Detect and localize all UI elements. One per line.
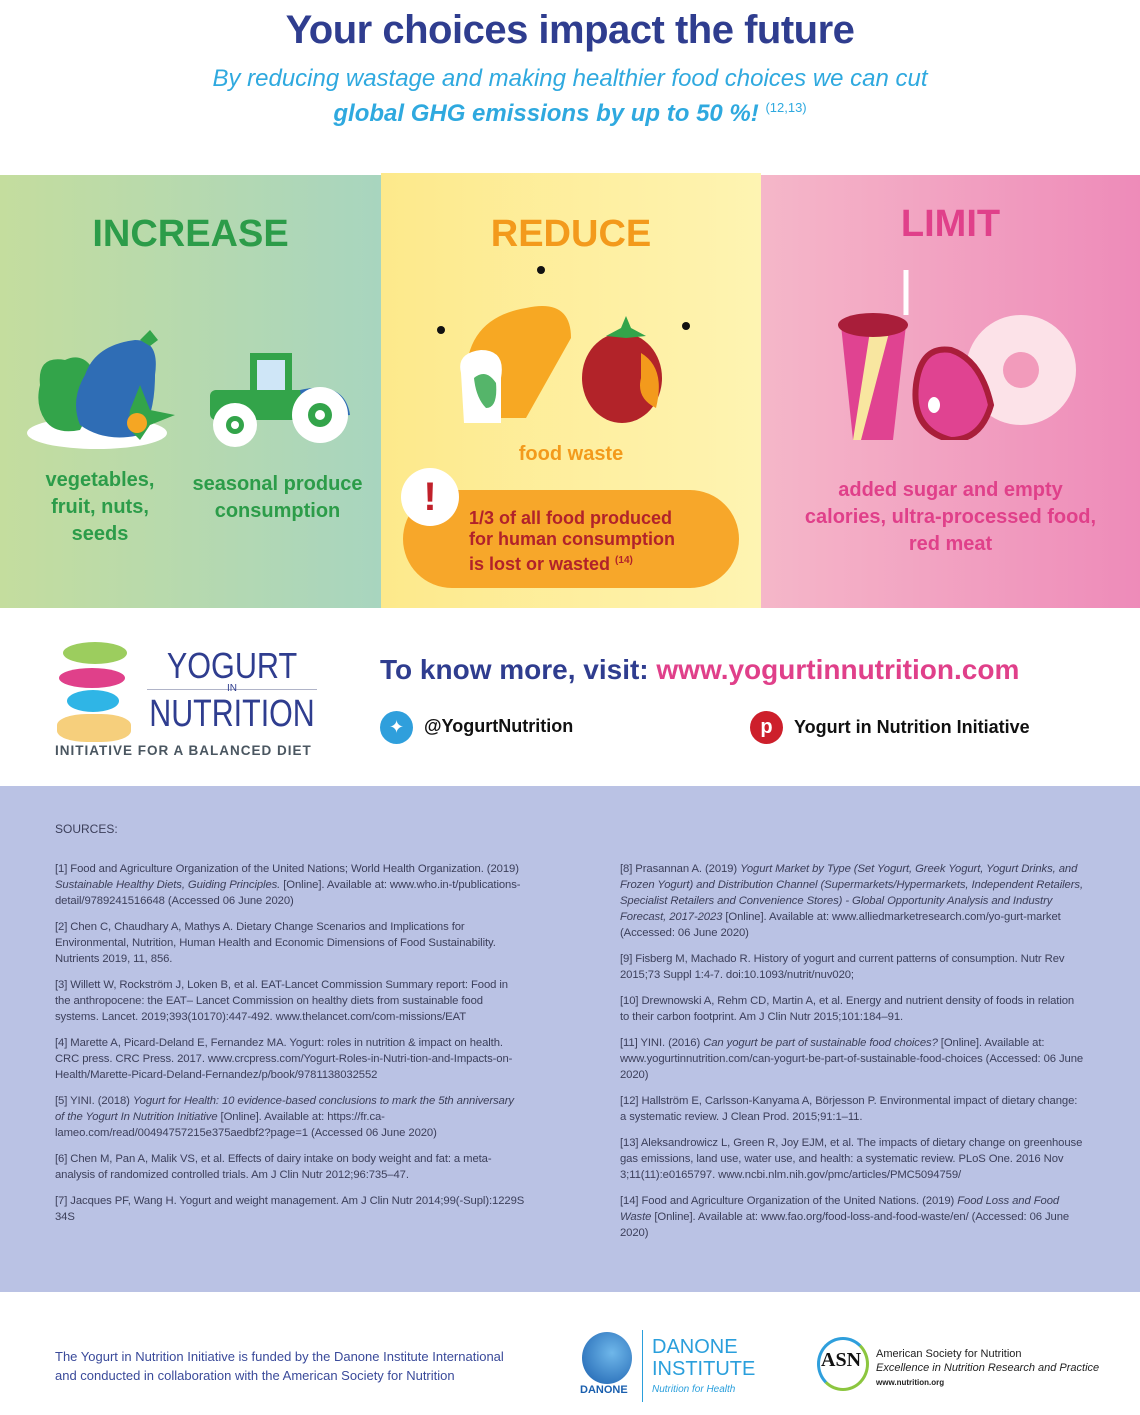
logo: ASN: American Society for Nutrition — [876, 1348, 1022, 1360]
text: added sugar: calories, ultra-processed food, — [805, 506, 1096, 528]
text: seasonal produce: seasonal produce — [192, 473, 363, 495]
sources right column: [12] Hallström E, Carlsson-Kanyama A, Börjesson P. Environmental impact of dietary change: a systematic review. J Clean Prod. 2015;91:1–11. — [620, 1095, 1077, 1123]
sources right column: [8] Prasannan A. (2019) Yogurt Market by Type (Set Yogurt, Greek Yogurt, Yogurt Drinks, and Frozen Yogurt) and Distribution Channel (Supermarkets/Hypermarkets, Independent Retailers, Specialist Retailers and Convenience Stores) - Global Opportunity Analysis and Industry Forecast, 2017-2023 [Online]. Available at: www.alliedmarketresearch.com/yo-gurt-market (Accessed: 06 June 2020) — [620, 863, 1083, 939]
text: added sugar — [805, 479, 1096, 555]
social: twitter — [380, 711, 573, 744]
sources right column: [9] Fisberg M, Machado R. History of yogurt and current patterns of consumption. Nutr Rev 2015;73 Suppl 1:4-7. doi:10.1093/nutrit/nuv020; — [620, 953, 1064, 981]
text: funding note — [55, 1349, 504, 1383]
sources left column: [1] Food and Agriculture Organization of the United Nations; World Health Organization. (2019) Sustainable Healthy Diets, Guiding Principles. [Online]. Available at: www.who.in-t/publications-detail/9789241516648 (Accessed 06 June 2020) — [55, 863, 520, 907]
sources left column: [7] Jacques PF, Wang H. Yogurt and weight management. Am J Clin Nutr 2014;99(-Supl):1229S 34S — [55, 1195, 524, 1223]
sources left column: [3] Willett W, Rockström J, Loken B, et al. EAT-Lancet Commission Summary report: Food in the anthropocene: the EAT– Lancet Commission on healthy diets from sustainable food systems. Lancet. 2019;393(10170):447-492. www.thelancet.com/com-missions/EAT — [55, 979, 508, 1023]
logo: danone institute — [580, 1330, 755, 1402]
sources left column: [5] YINI. (2018) Yogurt for Health: 10 evidence-based conclusions to mark the 5th anniversary of the Yogurt In Nutrition Initiative [Online]. Available at: https://fr.ca-lameo.com/read/00494757215e375aedbf2?page=1 (Accessed 06 June 2020) — [55, 1095, 514, 1139]
logo: ASN — [817, 1337, 1099, 1391]
callout: one third wasted: for human consumption — [469, 529, 675, 549]
social: pinterest — [750, 711, 1030, 744]
text: funding note: The Yogurt in Nutrition Initiative is funded by the Danone Institute International — [55, 1349, 504, 1364]
logo: ASN: ASN — [821, 1349, 861, 1371]
text: p — [760, 716, 773, 738]
logo: ASN: Excellence in Nutrition Research and Practice — [876, 1362, 1099, 1374]
text: seasonal produce — [192, 473, 363, 522]
icon: tractor — [210, 353, 350, 447]
text: Yogurt in Nutrition Initiative — [794, 717, 1030, 737]
text: @YogurtNutrition — [424, 716, 573, 736]
logo: danone institute: DANONE — [580, 1384, 628, 1396]
subtitle — [212, 65, 928, 127]
icon: exclamation — [401, 468, 459, 526]
icon: fruits and vegetables — [27, 330, 175, 449]
subtitle: global GHG emissions by up to 50 %! (12,13) — [333, 100, 807, 127]
panel: reduce — [381, 173, 761, 608]
text: added sugar: red meat — [909, 533, 992, 555]
heading: limit: LIMIT — [901, 203, 1000, 245]
callout: one third wasted: is lost or wasted (14) — [469, 554, 633, 574]
logo: yogurt in nutrition — [55, 642, 317, 758]
logo: yogurt in nutrition: INITIATIVE FOR A BALANCED DIET — [55, 743, 312, 758]
callout: one third wasted: 1/3 of all food produced — [469, 508, 672, 528]
callout: one third wasted — [403, 490, 739, 588]
icon: exclamation: ! — [423, 475, 437, 519]
logo: ASN: www.nutrition.org — [876, 1378, 944, 1387]
subtitle: By reducing wastage and making healthier food choices we can cut — [212, 65, 928, 92]
panel: increase — [0, 175, 381, 608]
logo: danone institute: DANONE — [652, 1336, 738, 1358]
sources right column: [11] YINI. (2016) Can yogurt be part of sustainable food choices? [Online]. Available at: www.yogurtinnutrition.com/can-yogurt-be-part-of-sustainable-food-choices (Accessed: 06 June 2020) — [620, 1037, 1083, 1081]
panel: sources — [0, 786, 1140, 1292]
text: seasonal produce: consumption — [215, 500, 340, 522]
icon: bread and tomato — [437, 266, 690, 423]
sources right column: [14] Food and Agriculture Organization of the United Nations. (2019) Food Loss and Food Waste [Online]. Available at: www.fao.org/food-loss-and-food-waste/en/ (Accessed: 06 June 2020) — [620, 1195, 1069, 1239]
logo: yogurt in nutrition: NUTRITION — [149, 693, 315, 735]
text: vegetables: fruit, nuts, — [51, 496, 149, 518]
sources left column: [4] Marette A, Picard-Deland E, Fernandez MA. Yogurt: roles in nutrition & impact on health. CRC press. CRC Press. 2017. www.crcpress.com/Yogurt-Roles-in-Nutri-tion-and-Impacts-on-Health/Marette-Picard-Deland-Fernandez/p/book/9781138032552 — [55, 1037, 512, 1081]
logo: danone institute: INSTITUTE — [652, 1358, 755, 1380]
text: vegetables: seeds — [72, 523, 128, 545]
text: added sugar: added sugar and empty — [838, 479, 1063, 501]
logo: yogurt in nutrition: YOGURT — [167, 645, 297, 686]
heading: sources: SOURCES: — [55, 822, 118, 836]
text: visit website: To know more, visit: www.yogurtinnutrition.com — [380, 654, 1019, 685]
text: food waste: food waste — [519, 443, 623, 465]
text: funding note: and conducted in collaboration with the American Society for Nutrition — [55, 1368, 455, 1383]
text: ✦ — [389, 717, 404, 737]
heading: reduce: REDUCE — [491, 213, 651, 255]
icon: soda meat donut — [838, 270, 1076, 440]
title: Your choices impact the future — [286, 8, 854, 52]
logo: yogurt in nutrition: IN — [227, 683, 237, 694]
sources right column: [13] Aleksandrowicz L, Green R, Joy EJM, et al. The impacts of dietary change on greenhouse gas emissions, land use, water use, and health: a systematic review. PLoS One. 2016 Nov 3;11(11):e0165797. www.ncbi.nlm.nih.gov/pmc/articles/PMC5094759/ — [620, 1137, 1082, 1181]
heading: increase: INCREASE — [92, 213, 289, 255]
sources left column — [55, 863, 524, 1223]
text: vegetables: vegetables, — [46, 469, 154, 491]
logo: danone institute: Nutrition for Health — [652, 1384, 735, 1395]
sources left column: [6] Chen M, Pan A, Malik VS, et al. Effects of dairy intake on body weight and fat: a meta-analysis of randomized controlled trials. Am J Clin Nutr 2012;96:735–47. — [55, 1153, 492, 1181]
sources left column: [2] Chen C, Chaudhary A, Mathys A. Dietary Change Scenarios and Implications for Environmental, Nutrition, Human Health and Economic Dimensions of Food Sustainability. Nutrients 2019, 11, 856. — [55, 921, 496, 965]
panel: limit — [761, 175, 1140, 608]
sources right column: [10] Drewnowski A, Rehm CD, Martin A, et al. Energy and nutrient density of foods in relation to their carbon footprint. Am J Clin Nutr 2015;101:184–91. — [620, 995, 1074, 1023]
text: vegetables — [46, 469, 154, 545]
sources right column — [620, 863, 1083, 1239]
